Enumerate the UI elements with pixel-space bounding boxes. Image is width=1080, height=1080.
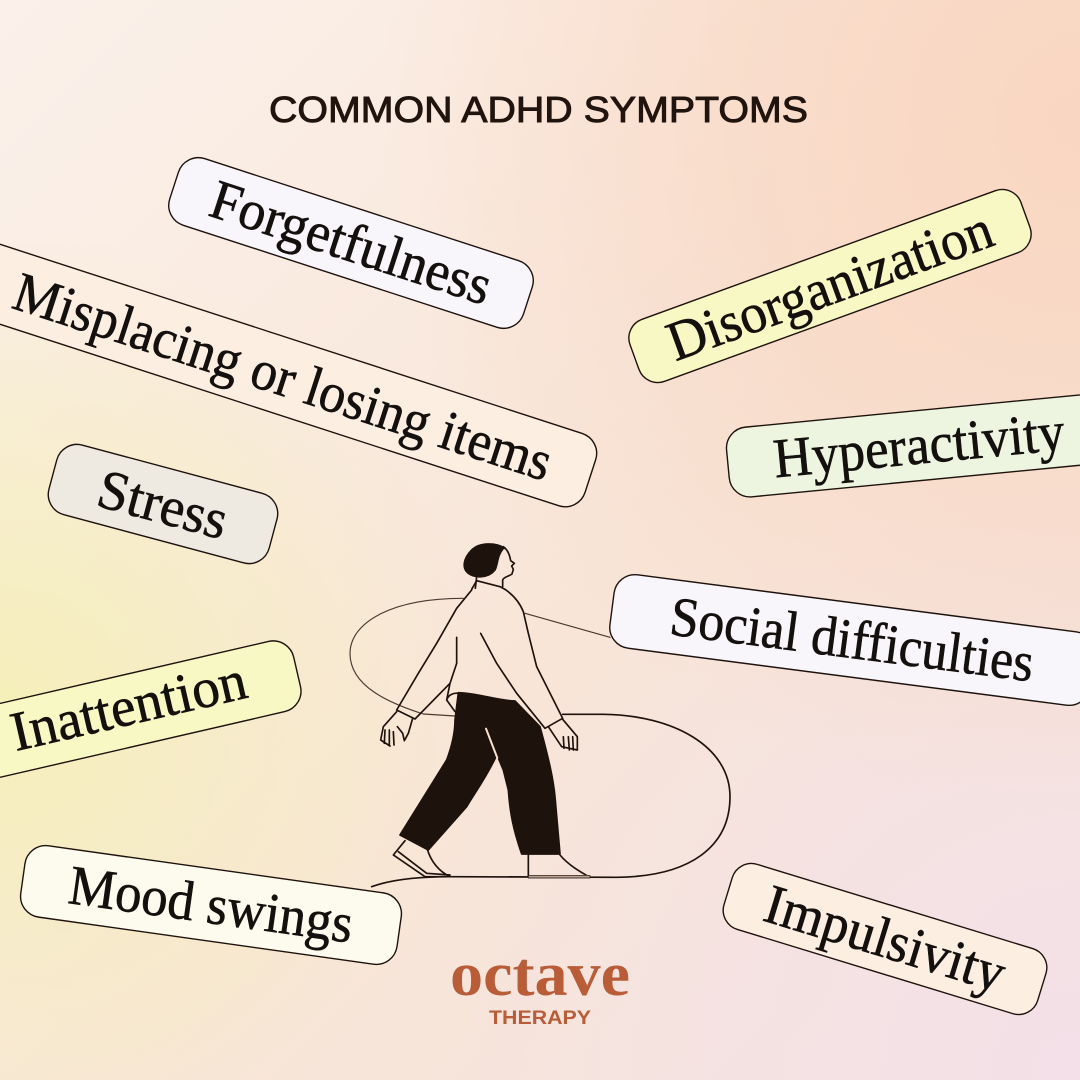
pill: Social difficulties: Social difficulties [667, 586, 1037, 694]
pill: Hyperactivity: Hyperactivity [771, 401, 1067, 490]
pill: Impulsivity: Impulsivity [757, 873, 1013, 1005]
face and neck [475, 547, 514, 588]
logo [450, 941, 630, 1029]
front shoe sole [528, 875, 590, 878]
title: COMMON ADHD SYMPTOMS [269, 89, 808, 130]
pill: Forgetfulness: Forgetfulness [203, 168, 499, 318]
pill: Stress [44, 440, 282, 568]
hair [464, 544, 505, 577]
back hand [381, 712, 413, 746]
collar [472, 581, 505, 589]
pill: Inattention: Inattention [5, 649, 252, 764]
pants gap highlight [486, 729, 497, 758]
pill: Impulsivity [718, 859, 1052, 1019]
pill: Disorganization: Disorganization [659, 198, 1001, 374]
front hand [548, 719, 577, 750]
pants [400, 693, 560, 854]
sweater [397, 589, 563, 728]
logo wordmark: octave [450, 941, 630, 1009]
illustration: person walking on pill outline [350, 544, 730, 887]
pill: Misplacing or losing items: Misplacing or losing items [6, 261, 560, 494]
pill outline [372, 714, 730, 887]
pill: Forgetfulness [163, 152, 539, 334]
pill: Mood swings [18, 843, 404, 967]
dashed loop line [350, 598, 610, 716]
pill: Inattention [0, 637, 305, 793]
logo subtitle: THERAPY [489, 1008, 591, 1029]
pill: Mood swings: Mood swings [65, 854, 357, 956]
front shoe [528, 854, 590, 877]
pill: Stress: Stress [91, 458, 235, 552]
back shoe [393, 841, 450, 877]
